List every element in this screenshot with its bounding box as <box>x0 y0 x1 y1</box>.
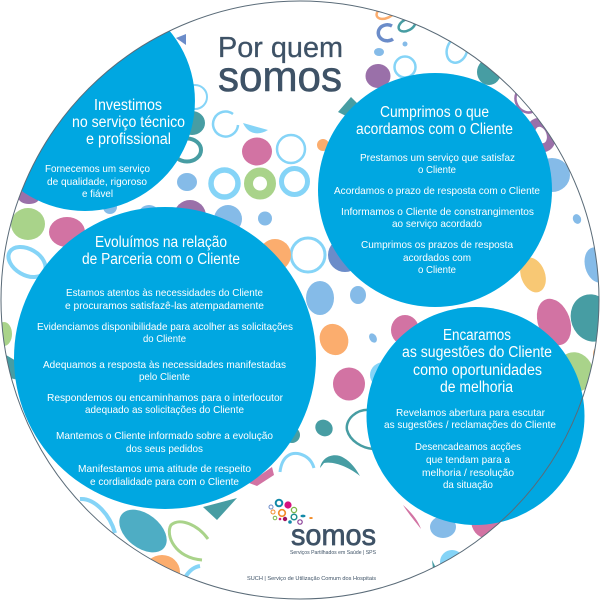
text block: evoluimos: do Cliente <box>143 333 186 345</box>
text block: cumprimos: ao serviço acordado <box>392 218 482 230</box>
heading: investimos: no serviço técnico <box>72 114 185 131</box>
text block: evoluimos: Evidenciamos disponibilidade para acolher as solicitações <box>37 321 293 333</box>
heading: cumprimos: Cumprimos o que <box>380 104 489 121</box>
panel: encaramos <box>366 307 584 525</box>
heading: investimos: e profissional <box>86 131 171 148</box>
text block: investimos <box>45 163 150 200</box>
text block: evoluimos: Manifestamos uma atitude de respeito <box>78 463 251 475</box>
text block: encaramos: melhoria / resolução <box>422 467 514 479</box>
text block: evoluimos <box>37 287 293 488</box>
text block: cumprimos: o Cliente <box>418 264 456 276</box>
heading: cumprimos <box>356 104 513 138</box>
text block: evoluimos: e cordialidade para com o Cliente <box>90 476 239 488</box>
panel: evoluimos <box>14 207 316 509</box>
text block: evoluimos: Mantemos o Cliente informado sobre a evolução <box>56 430 273 442</box>
heading: cumprimos: acordamos com o Cliente <box>356 121 513 138</box>
heading: investimos <box>72 97 185 148</box>
text block: cumprimos <box>334 152 540 276</box>
logo: somos: somos <box>291 519 376 552</box>
text block: evoluimos: adequado as solicitações do Cliente <box>85 404 244 416</box>
panel: investimos <box>22 31 195 211</box>
text block: encaramos <box>384 407 556 491</box>
text block: encaramos: da situação <box>443 479 493 491</box>
text block: investimos: de qualidade, rigoroso <box>47 176 147 188</box>
heading: encaramos: como oportunidades <box>413 362 542 379</box>
heading: evoluimos: Evoluímos na relação <box>95 234 227 251</box>
icon: logo bubbles <box>269 500 313 524</box>
logo: somos <box>269 500 376 556</box>
text block: encaramos: Desencadeamos acções <box>415 441 521 453</box>
heading: encaramos <box>402 327 552 396</box>
text block: evoluimos: pelo Cliente <box>139 371 190 383</box>
text block: evoluimos: Estamos atentos às necessidades do Cliente <box>66 287 263 299</box>
text block: evoluimos: dos seus pedidos <box>126 443 203 455</box>
heading: evoluimos <box>82 234 240 268</box>
text block: cumprimos: Informamos o Cliente de constrangimentos <box>341 206 534 218</box>
text block: encaramos: que tendam para a <box>426 454 510 466</box>
text block: cumprimos: acordados com <box>403 252 471 264</box>
footer: SUCH | Serviço de Utilização Comum dos Hospitais <box>247 576 376 582</box>
text block: encaramos: Revelamos abertura para escutar <box>396 407 545 419</box>
title: somos <box>218 53 342 101</box>
title <box>218 32 343 101</box>
text block: encaramos: as sugestões / reclamações do Cliente <box>384 419 556 431</box>
heading: encaramos: as sugestões do Cliente <box>402 344 552 361</box>
text block: cumprimos: Cumprimos os prazos de resposta <box>361 239 513 251</box>
text block: investimos: Fornecemos um serviço <box>45 163 150 175</box>
heading: encaramos: de melhoria <box>440 379 513 396</box>
text block: investimos: e fiável <box>82 188 113 200</box>
text block: evoluimos: Respondemos ou encaminhamos para o interlocutor <box>47 392 283 404</box>
text block: cumprimos: o Cliente <box>418 164 456 176</box>
text block: cumprimos: Acordamos o prazo de resposta com o Cliente <box>334 185 540 197</box>
logo: somos: Serviços Partilhados em Saúde | SPS <box>290 550 376 556</box>
panel: cumprimos <box>318 73 552 307</box>
text block: cumprimos: Prestamos um serviço que satisfaz <box>360 152 515 164</box>
heading: evoluimos: de Parceria com o Cliente <box>82 251 240 268</box>
text block: evoluimos: Adequamos a resposta às necessidades manifestadas <box>43 359 286 371</box>
heading: investimos: Investimos <box>94 97 162 114</box>
heading: encaramos: Encaramos <box>443 327 511 344</box>
title: Por quem <box>218 32 343 64</box>
text block: evoluimos: e procuramos satisfazê-las atempadamente <box>65 300 264 312</box>
